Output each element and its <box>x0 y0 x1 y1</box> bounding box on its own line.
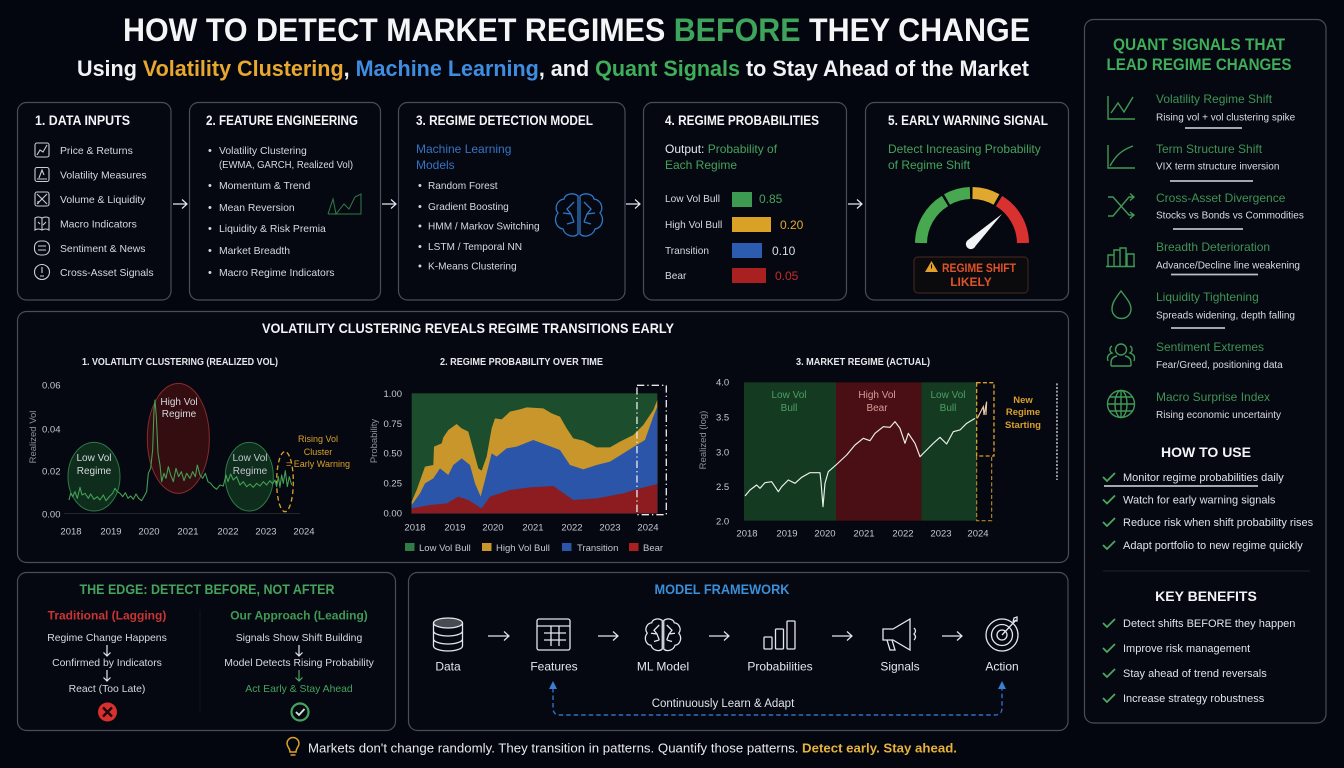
bar: bear <box>665 268 799 283</box>
chart 1: realized vol: = Early Warning <box>286 459 350 469</box>
signal: cross-asset divergence <box>1108 191 1304 229</box>
legend: Transition <box>577 543 618 554</box>
list: key benefits: Stay ahead of trend reversals <box>1123 668 1267 680</box>
feature list: Macro Regime Indicators <box>219 268 334 279</box>
panel: 4. regime probabilities <box>644 102 846 300</box>
chart 1: realized vol: 0.06 <box>42 380 60 392</box>
signal: macro surprise index: Macro Surprise Index <box>1156 390 1270 404</box>
item: volatility measures <box>35 168 147 182</box>
list: how to use: Adapt portfolio to new regime quickly <box>1123 540 1303 552</box>
legend <box>405 543 663 554</box>
signal: term structure shift: Term Structure Shift <box>1156 142 1263 156</box>
chart 3: market regime: 2019 <box>776 528 798 540</box>
output description: Output: Probability of <box>665 142 777 156</box>
model list: LSTM / Temporal NN <box>428 242 522 253</box>
step: probabilities <box>747 621 813 674</box>
chart 3: market regime: 2022 <box>892 528 914 540</box>
bar: low vol bull: 0.85 <box>759 192 783 206</box>
step: action <box>985 617 1019 674</box>
bar: transition: 0.10 <box>772 244 796 258</box>
column: traditional lagging: Traditional (Lagging) <box>48 608 166 622</box>
panel: 1. data inputs <box>18 102 171 300</box>
signal: breadth deterioration: Advance/Decline line weakening <box>1156 260 1300 272</box>
item: sentiment and news: Sentiment & News <box>60 244 145 255</box>
model list: • <box>418 241 422 253</box>
alert: regime shift likely <box>914 257 1028 293</box>
step: features <box>530 619 578 674</box>
list: how to use: Reduce risk when shift probability rises <box>1123 517 1314 529</box>
feature list: • <box>208 180 212 192</box>
signal: volatility regime shift: Rising vol + vol clustering spike <box>1156 112 1296 124</box>
step: action: Action <box>985 660 1019 674</box>
chart 2: regime probability: 2019 <box>444 522 466 534</box>
warning description: Detect Increasing Probability <box>888 142 1041 156</box>
column: our approach leading: Signals Show Shift Building <box>236 633 362 644</box>
chart 1: realized vol: High Vol <box>160 397 198 408</box>
chart 3: market regime: 2.5 <box>716 482 729 493</box>
heading: the edge: THE EDGE: DETECT BEFORE, NOT AFTER <box>80 581 334 597</box>
chart 2: regime probability <box>369 357 666 554</box>
chart 3: market regime: 2023 <box>930 528 952 540</box>
feature list: Volatility Clustering <box>219 146 307 157</box>
icon: red cross <box>98 702 117 722</box>
gauge <box>921 193 1023 249</box>
signal: volatility regime shift: Volatility Regime Shift <box>1156 92 1273 106</box>
item: volatility measures: Volatility Measures <box>60 170 147 182</box>
list: key benefits: Improve risk management <box>1123 643 1250 655</box>
panel: 3. regime detection model <box>398 102 625 300</box>
chart 1: realized vol: 2024 <box>293 526 315 538</box>
step: ml model <box>637 619 689 674</box>
chart 3: market regime <box>698 357 1057 540</box>
icon: blue brain <box>556 194 602 236</box>
arrow <box>832 632 852 640</box>
chart 2: regime probability: 0.00 <box>384 508 402 520</box>
chart 1: realized vol: 2019 <box>100 526 122 538</box>
bar: bear: Bear <box>665 271 687 282</box>
chart 3: market regime: New <box>1013 395 1033 406</box>
chart 3: market regime: Low Vol <box>930 390 966 401</box>
column: our approach leading: Model Detects Rising Probability <box>224 658 375 669</box>
bar: bear: 0.05 <box>775 269 799 283</box>
chart 3: market regime: 2024 <box>967 528 989 540</box>
item: macro indicators <box>35 217 137 230</box>
chart 3: market regime: 2018 <box>736 528 758 540</box>
model list: • <box>418 180 422 192</box>
chart 3: market regime: 3. MARKET REGIME (ACTUAL) <box>796 357 930 368</box>
warning description: of Regime Shift <box>888 158 971 172</box>
chart 2: regime probability: 1.00 <box>384 389 402 400</box>
chart 1: realized vol: Regime <box>162 409 197 420</box>
feedback loop: continuously learn and adapt: Continuously Learn & Adapt <box>652 698 795 710</box>
legend: High Vol Bull <box>496 543 550 554</box>
feature list: • <box>208 223 212 235</box>
signal: sentiment extremes: Fear/Greed, positioning data <box>1156 360 1283 371</box>
chart 3: market regime: Realized (log) <box>698 411 709 469</box>
feature list: Mean Reversion <box>219 203 295 214</box>
column: our approach leading: Our Approach (Leading) <box>230 608 368 622</box>
chart 2: regime probability: 0.50 <box>384 448 402 460</box>
chart 3: market regime: Low Vol <box>771 390 807 401</box>
chart 2: regime probability: 2018 <box>404 522 426 534</box>
feature list: Market Breadth <box>219 246 290 257</box>
list: how to use <box>1103 472 1314 552</box>
bar: transition <box>665 243 796 258</box>
chart 1: realized vol <box>28 357 350 538</box>
item: sentiment and news <box>34 241 145 255</box>
panel: 5. early warning signal <box>866 102 1068 300</box>
bar: low vol bull: Low Vol Bull <box>665 194 720 205</box>
model list: Gradient Boosting <box>428 202 509 213</box>
heading: early warning signal: 5. EARLY WARNING SIGNAL <box>888 113 1048 128</box>
item: price and returns <box>35 143 133 157</box>
chart 3: market regime: 3.5 <box>716 412 729 424</box>
column: traditional lagging <box>47 608 167 722</box>
heading: feature engineering: 2. FEATURE ENGINEERING <box>206 113 358 128</box>
column: our approach leading: Act Early & Stay Ahead <box>245 684 353 695</box>
heading: key benefits: KEY BENEFITS <box>1155 588 1257 604</box>
panel: quant signals sidebar: LEAD REGIME CHANGES <box>1106 56 1292 74</box>
arrow: features to model <box>382 200 396 208</box>
step: ml model: ML Model <box>637 660 689 674</box>
chart 1: realized vol: 2022 <box>217 526 239 538</box>
heading: regime detection model: 3. REGIME DETECTION MODEL <box>416 113 593 128</box>
heading: model framework: MODEL FRAMEWORK <box>654 581 790 597</box>
chart 3: market regime: Bear <box>866 403 888 414</box>
chart 2: regime probability: 2021 <box>522 522 544 534</box>
bar: high vol bull: 0.20 <box>780 218 804 232</box>
bar: high vol bull <box>665 217 804 232</box>
signal: macro surprise index <box>1108 390 1281 421</box>
signal: liquidity tightening <box>1112 290 1295 328</box>
heading: regime probabilities: 4. REGIME PROBABILITIES <box>665 113 819 128</box>
chart 1: realized vol: 0.02 <box>42 466 60 478</box>
bar: transition: Transition <box>665 246 709 257</box>
panel: the edge <box>18 572 396 730</box>
panel: model framework <box>408 572 1068 730</box>
chart 3: market regime: High Vol <box>858 390 896 401</box>
bar: low vol bull <box>665 192 783 207</box>
panel: volatility clustering charts <box>18 312 1068 562</box>
icon: lightbulb <box>287 738 299 755</box>
signal: term structure shift: VIX term structure inversion <box>1156 162 1279 172</box>
chart 3: market regime: 2021 <box>853 528 875 540</box>
item: volume and liquidity: Volume & Liquidity <box>60 195 146 206</box>
step: probabilities: Probabilities <box>747 660 813 674</box>
chart 2: regime probability: 2023 <box>599 522 621 534</box>
column: our approach leading <box>224 608 375 720</box>
chart 3: market regime: 2020 <box>814 528 836 540</box>
list: how to use: Monitor regime probabilities daily <box>1123 472 1284 484</box>
bar: high vol bull: High Vol Bull <box>665 220 722 231</box>
chart 2: regime probability: 0.25 <box>384 478 402 490</box>
chart 2: regime probability: 0.75 <box>384 419 402 430</box>
item: price and returns: Price & Returns <box>60 146 133 157</box>
chart 1: realized vol: 0.04 <box>42 424 60 436</box>
model list <box>418 180 540 272</box>
heading: quant signals: QUANT SIGNALS THAT <box>1113 36 1285 54</box>
item: volume and liquidity <box>35 192 146 206</box>
chart 1: realized vol: 0.00 <box>42 510 60 520</box>
chart 1: realized vol: 2020 <box>138 526 160 538</box>
item: cross-asset signals <box>34 264 154 280</box>
arrow <box>598 632 618 640</box>
signal: breadth deterioration: Breadth Deterioration <box>1156 240 1270 254</box>
signal: sentiment extremes <box>1108 340 1283 371</box>
signal: cross-asset divergence: Stocks vs Bonds vs Commodities <box>1156 210 1304 222</box>
subtitle: Using Volatility Clustering, Machine Learning, and Quant Signals to Stay Ahead of the Market <box>77 56 1030 81</box>
legend: Bear <box>643 543 663 554</box>
chart 2: regime probability: 2020 <box>482 522 504 534</box>
chart 1: realized vol: Cluster <box>304 447 332 457</box>
chart 1: realized vol: Regime <box>233 466 268 477</box>
chart 3: market regime: Bull <box>781 403 797 414</box>
subheading: machine learning models: Machine Learning <box>416 142 511 156</box>
model list: • <box>418 220 422 232</box>
output description: Each Regime <box>665 158 737 172</box>
icon: green check <box>292 704 308 720</box>
signal: macro surprise index: Rising economic uncertainty <box>1156 410 1281 421</box>
chart 2: regime probability: 2024 <box>637 522 659 534</box>
signal: volatility regime shift <box>1108 92 1296 128</box>
step: features: Features <box>530 660 578 674</box>
feature list: Momentum & Trend <box>219 181 310 192</box>
arrow: inputs to features <box>173 200 187 208</box>
chart 2: regime probability: 2022 <box>561 522 583 534</box>
chart 1: realized vol: 1. VOLATILITY CLUSTERING (REALIZED VOL) <box>82 357 278 368</box>
chart 1: realized vol: Regime <box>77 466 112 477</box>
icon: mini green chart <box>328 194 361 214</box>
chart 3: market regime: 2.0 <box>716 516 729 528</box>
model list: HMM / Markov Switching <box>428 222 540 232</box>
feature list: • <box>208 202 212 214</box>
step: signals: Signals <box>880 660 920 674</box>
chart 1: realized vol: 2023 <box>255 526 277 538</box>
model list: • <box>418 260 422 272</box>
list: key benefits: Detect shifts BEFORE they happen <box>1123 618 1295 630</box>
alert: regime shift likely: LIKELY <box>950 275 992 289</box>
item: macro indicators: Macro Indicators <box>60 220 137 230</box>
footer message: Markets don't change randomly. They transition in patterns. Quantify those patterns. Detect early. Stay ahead. <box>308 740 957 756</box>
step: data <box>434 618 462 674</box>
alert: regime shift likely: REGIME SHIFT <box>942 261 1017 275</box>
column: traditional lagging: Regime Change Happens <box>47 633 167 644</box>
heading: data inputs: 1. DATA INPUTS <box>35 113 130 128</box>
title: HOW TO DETECT MARKET REGIMES BEFORE THEY CHANGE <box>123 12 1030 48</box>
signal: sentiment extremes: Sentiment Extremes <box>1156 340 1264 354</box>
model list: • <box>418 201 422 213</box>
list: key benefits <box>1103 618 1295 705</box>
feature list: Liquidity & Risk Premia <box>219 224 326 235</box>
signal: term structure shift <box>1108 142 1279 181</box>
panel: 2. feature engineering <box>190 102 380 300</box>
model list: Random Forest <box>428 181 498 192</box>
column: traditional lagging: React (Too Late) <box>69 684 145 695</box>
list: how to use: Watch for early warning signals <box>1123 494 1276 506</box>
feature list: (EWMA, GARCH, Realized Vol) <box>219 160 353 171</box>
chart 3: market regime: 3.0 <box>716 448 729 458</box>
signal: liquidity tightening: Liquidity Tightening <box>1156 290 1259 304</box>
arrow <box>709 632 729 640</box>
feature list: • <box>208 145 212 157</box>
chart 3: market regime: Bull <box>940 403 956 414</box>
chart 3: market regime: Regime <box>1006 407 1040 418</box>
heading: how to use: HOW TO USE <box>1161 444 1251 460</box>
arrow <box>488 632 509 640</box>
model list: K-Means Clustering <box>428 262 517 272</box>
chart 2: regime probability: 2. REGIME PROBABILITY OVER TIME <box>440 357 603 368</box>
legend: Low Vol Bull <box>419 543 471 554</box>
heading: charts: VOLATILITY CLUSTERING REVEALS REGIME TRANSITIONS EARLY <box>262 320 675 336</box>
chart 3: market regime: 4.0 <box>716 378 729 388</box>
chart 1: realized vol: Rising Vol <box>298 434 338 444</box>
signal: breadth deterioration <box>1106 240 1300 274</box>
chart 3: market regime: Starting <box>1005 420 1041 431</box>
step: signals <box>880 619 920 674</box>
panel: quant signals sidebar <box>1084 20 1326 723</box>
step: data: Data <box>435 660 461 674</box>
arrow <box>942 632 962 640</box>
feature list <box>208 145 353 279</box>
subheading: machine learning models: Models <box>416 158 455 172</box>
feedback loop: continuously learn and adapt <box>549 681 1006 715</box>
chart 1: realized vol: Low Vol <box>76 453 112 464</box>
signal: liquidity tightening: Spreads widening, depth falling <box>1156 310 1295 322</box>
chart 1: realized vol: 2018 <box>60 526 82 538</box>
chart 1: realized vol: 2021 <box>177 526 199 538</box>
feature list: • <box>208 267 212 279</box>
feature list: • <box>208 245 212 257</box>
signal: cross-asset divergence: Cross-Asset Divergence <box>1156 191 1286 205</box>
column: traditional lagging: Confirmed by Indicators <box>52 658 162 669</box>
chart 2: regime probability: Probability <box>369 419 380 463</box>
list: key benefits: Increase strategy robustness <box>1123 693 1265 705</box>
chart 1: realized vol: Low Vol <box>232 453 268 464</box>
arrow: model to probabilities <box>626 200 640 208</box>
item: cross-asset signals: Cross-Asset Signals <box>60 268 154 279</box>
chart 1: realized vol: Realized Vol <box>28 411 39 463</box>
arrow: probabilities to warning <box>848 200 862 208</box>
